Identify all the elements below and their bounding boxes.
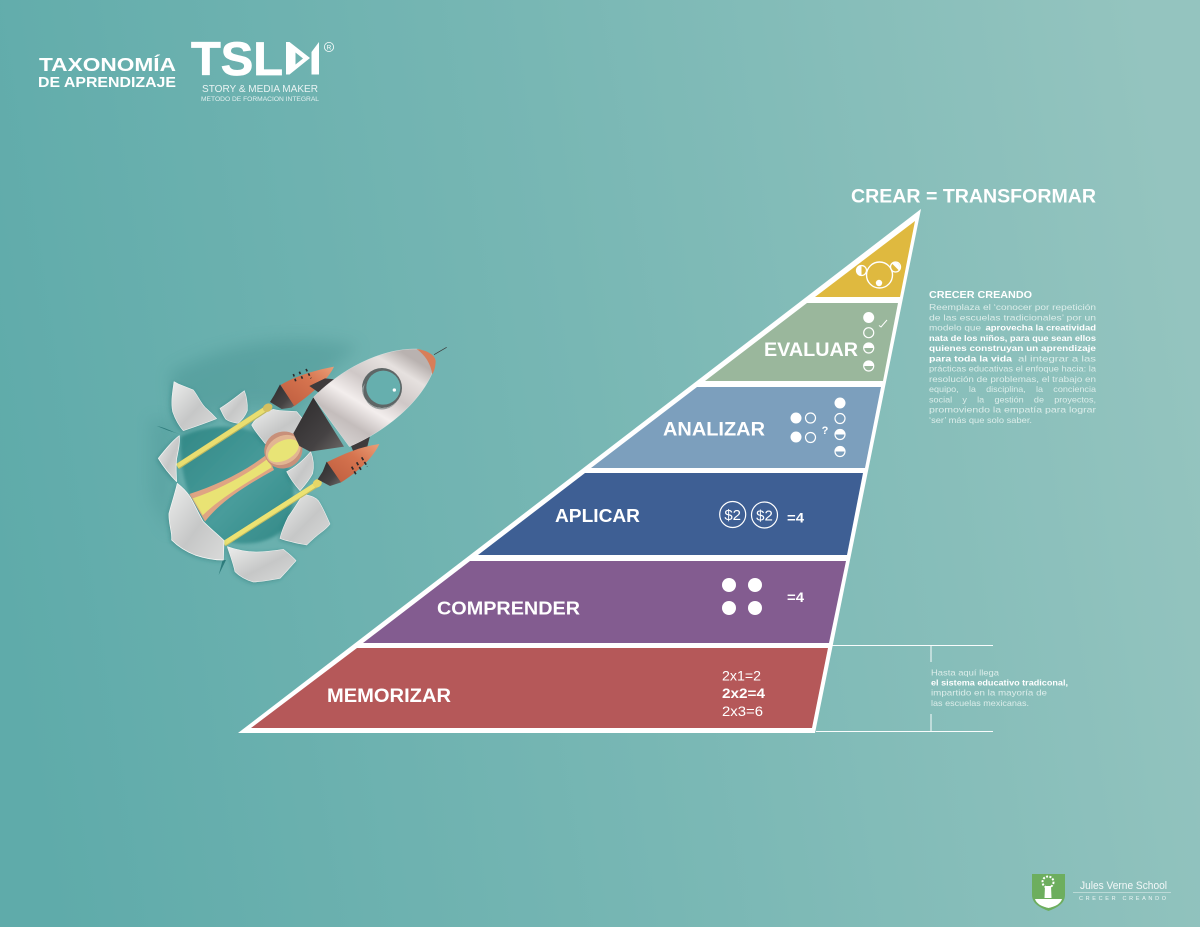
bracket: traditional system range — [816, 645, 993, 732]
side flames — [177, 402, 323, 544]
level: crear — [815, 221, 915, 297]
level: memorizar: 2x2=4 — [722, 685, 765, 701]
text block: crecer creando: de las escuelas tradicionales’ por un — [929, 313, 1097, 322]
level: memorizar: MEMORIZAR — [327, 686, 451, 707]
text block: crecer creando: modelo que — [929, 324, 982, 332]
logo: TSL story and media maker — [191, 32, 334, 103]
level: analizar: ? — [822, 425, 829, 437]
logo: taxonomía de aprendizaje: TAXONOMÍA — [39, 54, 176, 75]
callout: sistema educativo tradicional — [931, 668, 1068, 708]
text block: crecer creando: aprovecha la creatividad — [986, 324, 1096, 332]
rocket illustration bursting through paper — [150, 340, 447, 582]
callout: sistema educativo tradicional: impartido en la mayoría de — [931, 688, 1048, 698]
level: evaluar: EVALUAR — [764, 340, 858, 361]
logo: TSL story and media maker: MÉTODO DE FORMACIÓN INTEGRAL — [201, 96, 320, 103]
logo: jules verne school: Jules Verne School — [1080, 880, 1167, 892]
logo: jules verne school: CRECER CREANDO — [1079, 896, 1167, 902]
level: aplicar: $2 — [756, 508, 773, 524]
text block: crecer creando: nata de los niños, para que sean ellos — [929, 334, 1097, 343]
engine — [293, 397, 344, 452]
pyramid — [238, 209, 921, 733]
hole — [180, 427, 294, 544]
level: evaluar — [705, 303, 898, 381]
text block: crecer creando: equipo, la disciplina, la conciencia — [929, 385, 1096, 394]
antenna — [434, 347, 447, 355]
level: memorizar — [251, 648, 828, 728]
level: analizar: ANALIZAR — [663, 420, 765, 440]
porthole — [362, 368, 402, 409]
booster top — [270, 367, 334, 409]
level: comprender: COMPRENDER — [437, 598, 580, 618]
torn paper flaps behind the flame — [172, 382, 330, 582]
teal tears — [157, 426, 226, 575]
text block: crecer creando: promoviendo la empatía para lograr — [929, 406, 1096, 414]
nose cone — [417, 349, 436, 374]
text block: crecer creando: ‘ser’ más que solo saber. — [929, 416, 1032, 425]
logo: jules verne school — [1032, 874, 1171, 911]
text block: crecer creando: prácticas educativas el enfoque hacia: la — [929, 364, 1097, 374]
text block: crecer creando: al integrar a las — [1018, 354, 1096, 363]
callout: sistema educativo tradicional: el sistema educativo tradiconal, — [931, 678, 1068, 688]
text block: crecer creando: resolución de problemas, el trabajo en — [929, 375, 1097, 384]
level: aplicar — [478, 473, 863, 555]
level: aplicar: $2 — [724, 507, 741, 524]
level: comprender: =4 — [787, 590, 805, 605]
level: aplicar: =4 — [787, 510, 805, 526]
title: crear = transformar: CREAR = TRANSFORMAR — [851, 186, 1096, 208]
level: comprender — [363, 561, 846, 643]
main flame — [189, 425, 309, 522]
text block: crecer creando — [929, 290, 1097, 425]
logo: taxonomía de aprendizaje: DE APRENDIZAJE — [38, 75, 176, 91]
text block: crecer creando: CRECER CREANDO — [929, 290, 1032, 301]
level: memorizar: 2x3=6 — [722, 703, 763, 719]
text block: crecer creando: social y la gestión de proyectos, — [929, 395, 1096, 404]
callout: sistema educativo tradicional: Hasta aquí llega — [931, 668, 1000, 678]
shadow around rocket and hole — [150, 340, 360, 537]
torn paper flaps in front of the flame — [158, 436, 224, 560]
level: analizar — [591, 387, 881, 468]
logo: TSL story and media maker: R — [327, 44, 332, 52]
level: aplicar: APLICAR — [555, 506, 640, 526]
callout: sistema educativo tradicional: las escuelas mexicanas. — [931, 699, 1029, 708]
text block: crecer creando: quienes construyan un aprendizaje — [929, 344, 1097, 353]
rocket — [270, 347, 447, 486]
text block: crecer creando: Reemplaza el ‘conocer por repetición — [929, 303, 1097, 312]
fins — [309, 378, 370, 454]
level: memorizar: 2x1=2 — [722, 668, 761, 684]
logo: TSL story and media maker: STORY & MEDIA MAKER — [202, 84, 318, 95]
logo: TSL story and media maker: TSL — [191, 32, 283, 85]
rocket body — [313, 349, 435, 447]
pyramid outline — [238, 209, 921, 733]
logo: taxonomía de aprendizaje — [38, 54, 176, 91]
icon: shield — [1032, 874, 1065, 911]
text block: crecer creando: para toda la vida — [929, 354, 1013, 363]
booster bottom — [318, 444, 379, 486]
